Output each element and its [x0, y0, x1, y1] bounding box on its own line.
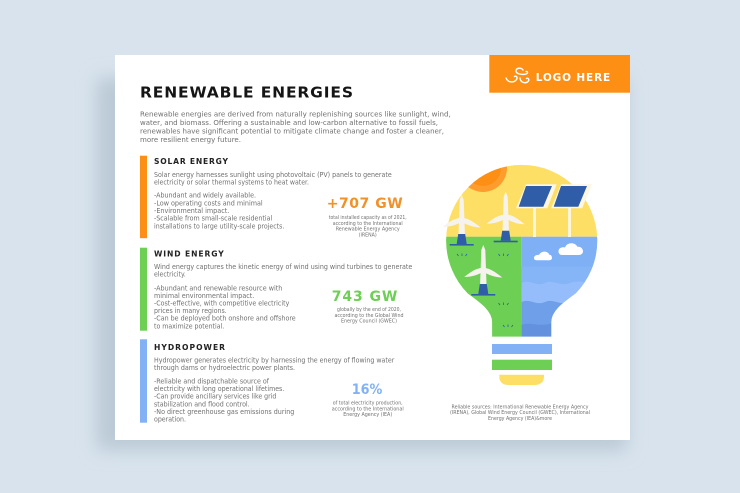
land: [446, 236, 522, 337]
intro paragraph: Renewable energies are derived from naturally replenishing sources like sunlight, wind,: [140, 110, 451, 119]
logo banner: [489, 55, 630, 93]
solar colour bar: [140, 156, 147, 238]
title: RENEWABLE ENERGIES: [140, 84, 353, 102]
hydro colour bar: [140, 339, 147, 423]
hydro bullet list: [154, 376, 295, 424]
solar heading: SOLAR ENERGY: [154, 157, 228, 166]
intro paragraph: more resilient energy future.: [140, 135, 241, 144]
hydro bullet list: stabilization and flood control.: [154, 399, 250, 408]
clouds: [534, 243, 583, 260]
intro paragraph: renewables have significant potential to mitigate climate change and foster a cleaner,: [140, 127, 444, 136]
wind heading: WIND ENERGY: [154, 250, 224, 258]
light bulb illustration: [443, 164, 598, 385]
solar statistic: +707 GW: [327, 196, 403, 212]
wind bullet list: -Cost-effective, with competitive electricity: [154, 298, 290, 307]
sky: [446, 164, 598, 237]
water: [522, 236, 598, 337]
solar bullet list: installations to large utility-scale projects.: [154, 221, 284, 230]
sources note: (IRENA), Global Wind Energy Council (GWEC), International: [450, 410, 590, 416]
intro paragraph: water, and biomass. Offering a sustainable and low-carbon alternative to fossil fuels,: [140, 118, 438, 127]
grass tufts: [457, 254, 513, 327]
wind statistic: 743 GW: [332, 289, 397, 305]
intro paragraph: [140, 110, 451, 144]
solar description: Solar energy harnesses sunlight using photovoltaic (PV) panels to generate: [154, 170, 392, 179]
bulb base: yellow cap: [499, 375, 544, 385]
solar bullet list: [154, 191, 284, 230]
sources note: [450, 404, 590, 422]
wind turbines: [443, 192, 525, 296]
wind statistic caption: [334, 307, 404, 325]
solar statistic caption: according to the International: [333, 221, 403, 227]
solar bullet list: -Scalable from small-scale residential: [154, 214, 272, 223]
hydro statistic caption: of total electricity production,: [333, 401, 403, 407]
hydro bullet list: -No direct greenhouse gas emissions during: [154, 407, 295, 416]
solar statistic caption: (IRENA): [359, 232, 377, 238]
wind bullet list: prices in many regions.: [154, 306, 227, 315]
solar description: [154, 170, 392, 187]
logo text: LOGO HERE: [536, 72, 610, 84]
hydro statistic caption: [332, 401, 404, 418]
wind statistic caption: according to the Global Wind: [334, 313, 404, 319]
wind description: [154, 262, 413, 279]
hydro bullet list: -Can provide ancillary services like grid: [154, 392, 277, 401]
icon: logo swirl: [506, 68, 529, 83]
hydro description: through dams or hydroelectric power plants.: [154, 363, 295, 372]
wind bullet list: minimal environmental impact.: [154, 291, 254, 300]
hydro heading: HYDROPOWER: [154, 343, 225, 352]
hydro bullet list: electricity with long operational lifetimes.: [154, 384, 284, 393]
wind statistic caption: globally by the end of 2020,: [337, 307, 401, 313]
wind bullet list: to maximize potential.: [154, 321, 224, 330]
hydro description: Hydropower generates electricity by harnessing the energy of flowing water: [154, 355, 395, 364]
solar panels: [516, 184, 592, 237]
hydro statistic: 16%: [352, 382, 382, 398]
icon: sun: [468, 166, 507, 192]
hydro statistic caption: Energy Agency (IEA): [343, 412, 392, 418]
solar statistic caption: Renewable Energy Agency: [336, 227, 400, 233]
hydro bullet list: -Reliable and dispatchable source of: [154, 376, 269, 385]
solar bullet list: -Abundant and widely available.: [154, 191, 256, 200]
bulb body: [446, 164, 598, 337]
bulb base: blue band: [492, 344, 552, 354]
hydro statistic caption: according to the International: [332, 406, 404, 412]
solar bullet list: -Low operating costs and minimal: [154, 198, 263, 207]
wind bullet list: -Can be deployed both onshore and offshore: [154, 314, 296, 323]
panel: wind energy: [140, 248, 413, 331]
wind bullet list: -Abundant and renewable resource with: [154, 283, 283, 292]
solar statistic caption: [329, 215, 407, 238]
solar description: electricity or solar thermal systems to heat water.: [154, 178, 309, 187]
wind bullet list: [154, 283, 296, 330]
panel: solar energy: [140, 156, 407, 238]
hydro description: [154, 355, 395, 372]
wind description: Wind energy captures the kinetic energy of wind using wind turbines to generate: [154, 262, 413, 271]
card shadow: [97, 78, 627, 450]
bulb outline: [446, 165, 598, 337]
wind description: electricity.: [154, 270, 186, 279]
hydro bullet list: operation.: [154, 415, 186, 424]
wind statistic caption: Energy Council (GWEC): [341, 319, 397, 325]
sources note: Energy Agency (IEA)&more: [488, 416, 552, 422]
sources note: Reliable sources: International Renewable Energy Agency: [452, 404, 589, 410]
panel: hydropower: [140, 339, 404, 424]
panel: white card: [115, 55, 630, 440]
wind colour bar: [140, 248, 147, 331]
solar statistic caption: total installed capacity as of 2021,: [329, 215, 407, 221]
bulb base: green band: [492, 360, 552, 370]
solar bullet list: -Environmental impact.: [154, 206, 229, 215]
